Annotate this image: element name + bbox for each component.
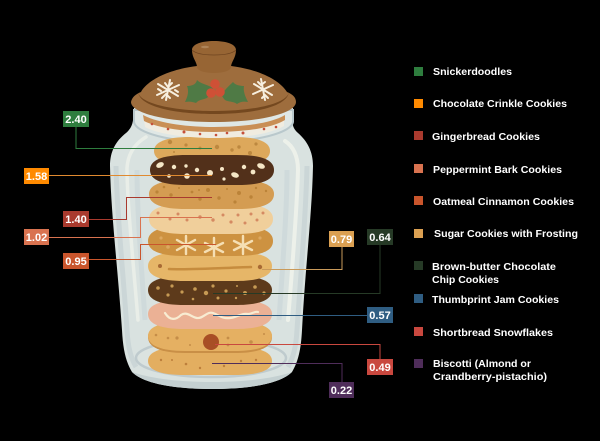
legend item: Snickerdoodles: Snickerdoodles bbox=[433, 66, 512, 78]
cookie: sugar with frosting bbox=[148, 252, 272, 281]
jar rim band bbox=[143, 115, 285, 138]
cookie: brown-butter chocolate chip bbox=[148, 276, 272, 305]
cookie: biscotti bbox=[148, 347, 272, 375]
callout: Biscotti 0.22: 0.22 bbox=[331, 385, 352, 397]
callout: Biscotti 0.22 bbox=[212, 364, 354, 398]
legend item: Oatmeal Cinnamon Cookies: Oatmeal Cinnamon Cookies bbox=[433, 196, 574, 208]
cookie stack bbox=[148, 137, 274, 375]
icon: holly and berries bbox=[185, 79, 248, 104]
callout: Brown-butter 0.64 bbox=[213, 229, 393, 294]
callout: Oatmeal Cinnamon 0.95 bbox=[63, 244, 216, 269]
callout: Brown-butter 0.64: 0.64 bbox=[369, 232, 392, 244]
cookie: shortbread bbox=[148, 322, 272, 353]
legend item: Brown-butter Chocolate Chip Cookies: Chip Cookies bbox=[432, 274, 499, 286]
cookie: chocolate crinkle bbox=[150, 155, 274, 185]
legend item: Chocolate Crinkle Cookies: Chocolate Crinkle Cookies bbox=[433, 98, 567, 110]
legend item: Shortbread Snowflakes: Shortbread Snowflakes bbox=[433, 327, 553, 339]
callout: Oatmeal Cinnamon 0.95: 0.95 bbox=[65, 256, 87, 268]
callout: Shortbread 0.49 bbox=[215, 344, 393, 375]
callout: Peppermint Bark 1.02 bbox=[24, 218, 212, 245]
cookie: gingerbread bbox=[149, 180, 274, 209]
callout: Shortbread 0.49: 0.49 bbox=[369, 362, 391, 374]
glass jar bbox=[110, 108, 313, 389]
callout: Sugar Cookies 0.79: 0.79 bbox=[331, 234, 352, 246]
callout: Thumbprint 0.57 bbox=[213, 307, 393, 323]
legend bbox=[414, 66, 578, 383]
cookie: oatmeal cinnamon bbox=[148, 226, 273, 256]
callout: Snickerdoodles 2.40 bbox=[63, 111, 212, 148]
callout: Chocolate Crinkle 1.58: 1.58 bbox=[26, 171, 47, 183]
callout: Gingerbread 1.40 bbox=[63, 198, 212, 227]
legend item: Brown-butter Chocolate Chip Cookies: Brown-butter Chocolate bbox=[432, 261, 556, 273]
callout: Thumbprint 0.57: 0.57 bbox=[369, 310, 391, 322]
legend item: Sugar Cookies with Frosting: Sugar Cookies with Frosting bbox=[434, 228, 578, 240]
legend item: Biscotti: Crandberry-pistachio) bbox=[433, 371, 547, 383]
cookie: snickerdoodles bbox=[154, 137, 270, 165]
legend item: Peppermint Bark Cookies: Peppermint Bark Cookies bbox=[433, 164, 562, 176]
legend item: Thumbprint Jam Cookies: Thumbprint Jam Cookies bbox=[432, 294, 559, 306]
callout: Snickerdoodles 2.40: 2.40 bbox=[65, 114, 87, 126]
legend item: Biscotti: Biscotti (Almond or bbox=[433, 358, 531, 370]
callout: Peppermint Bark 1.02: 1.02 bbox=[26, 232, 47, 244]
callout: Sugar Cookies 0.79 bbox=[262, 231, 354, 270]
cookie: thumbprint jam bbox=[148, 300, 272, 329]
callout: Chocolate Crinkle 1.58 bbox=[24, 168, 212, 184]
legend item: Gingerbread Cookies: Gingerbread Cookies bbox=[432, 131, 540, 143]
jar lid bbox=[131, 65, 296, 122]
legend item: Brown-butter Chocolate Chip Cookies bbox=[414, 261, 556, 286]
icon: left snowflake bbox=[157, 80, 179, 100]
callout: Gingerbread 1.40: 1.40 bbox=[65, 214, 87, 226]
cookie: peppermint bark bbox=[149, 204, 273, 234]
jar lid knob bbox=[192, 41, 236, 73]
legend item: Biscotti bbox=[414, 358, 547, 383]
icon: right snowflake bbox=[253, 79, 273, 100]
